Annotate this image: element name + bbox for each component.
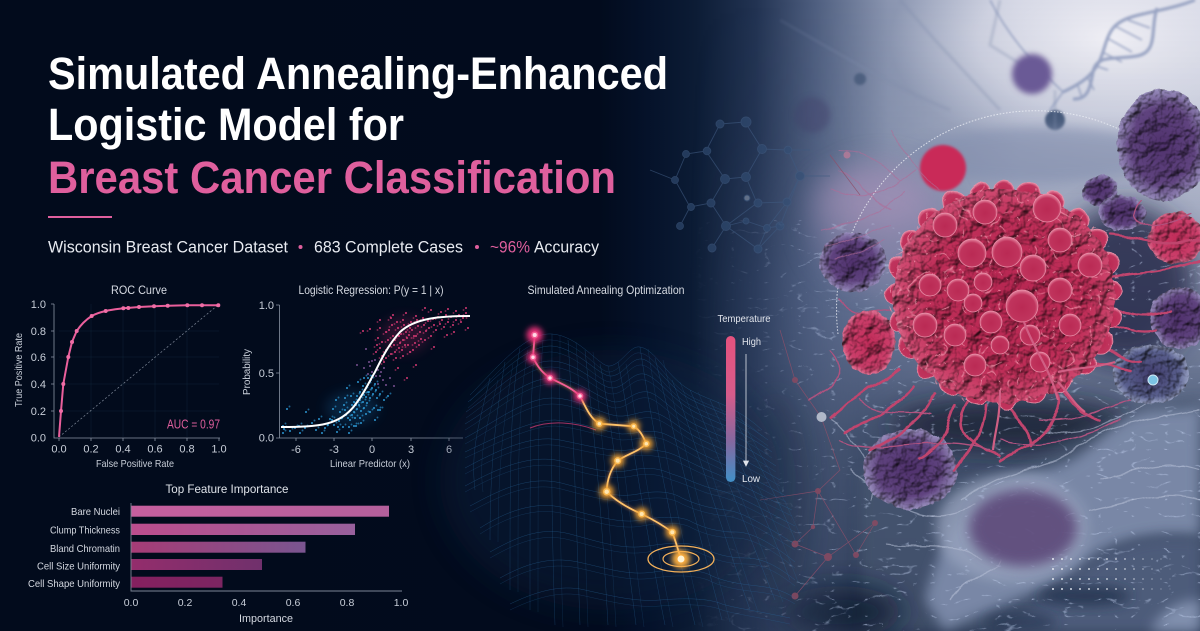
lumpy rim xyxy=(885,180,1122,409)
AUC label: AUC = 0.97 xyxy=(167,418,220,432)
path node glows xyxy=(527,327,690,568)
annealing title: Simulated Annealing Optimization xyxy=(528,283,684,297)
ROC y tick labels: 0.0 xyxy=(31,432,46,444)
small pink cell xyxy=(920,145,966,191)
main tumor xyxy=(885,180,1125,450)
bars xyxy=(131,506,389,588)
optimization path: cool segment xyxy=(580,396,681,559)
logistic x tick labels xyxy=(291,444,452,456)
ROC x tick labels: 0.2 xyxy=(83,444,99,456)
ROC title: ROC Curve xyxy=(111,283,167,297)
title accent rule xyxy=(48,216,112,218)
annealing optimization panel xyxy=(440,283,803,627)
ROC y tick labels: 1.0 xyxy=(31,299,46,311)
logistic axis titles: Linear Predictor (x) xyxy=(330,458,410,470)
temperature bar xyxy=(726,336,735,482)
dashed orbit arc xyxy=(837,111,1123,334)
ROC diagonal xyxy=(59,305,218,437)
feature labels: Clump Thickness xyxy=(50,524,120,536)
scatter: mixed class xyxy=(357,349,394,386)
mesh cross lines xyxy=(474,334,803,627)
logistic x tick labels: -3 xyxy=(329,444,339,456)
ROC curve chart: True Positive Rate xyxy=(13,333,25,407)
ROC curve chart xyxy=(13,283,227,470)
high label: High xyxy=(742,336,761,348)
temperature arrow xyxy=(744,354,748,466)
ROC x tick labels: 1.0 xyxy=(211,444,227,456)
tumor veins xyxy=(993,322,1115,450)
temperature label: Temperature xyxy=(718,313,771,325)
microscopy illustration: tumor cell and tissue xyxy=(690,0,1200,631)
x tick labels xyxy=(124,597,408,609)
ROC y tick labels: 0.2 xyxy=(31,406,46,418)
logistic y tick labels: 1.0 xyxy=(259,300,274,312)
subtitle: Wisconsin Breast Cancer Dataset xyxy=(48,238,288,256)
ROC axis titles: False Positive Rate xyxy=(96,458,174,470)
lumpy cells xyxy=(820,89,1200,566)
foreground cell nucleus spot xyxy=(1148,375,1158,385)
low label: Low xyxy=(742,473,760,485)
logistic x tick labels: 6 xyxy=(446,444,452,456)
ROC x tick labels: 0.6 xyxy=(147,444,163,456)
tumor cell ridges xyxy=(885,180,1125,412)
tissue fibre web xyxy=(690,220,1200,631)
DNA helix xyxy=(990,0,1195,110)
x tick labels: 0.8 xyxy=(340,597,354,609)
x tick labels: 0.0 xyxy=(124,597,138,609)
feature labels: Bland Chromatin xyxy=(50,543,120,555)
ROC x tick labels: 0.0 xyxy=(51,444,67,456)
feature labels: Bare Nuclei xyxy=(71,506,120,518)
pale connective fibres xyxy=(830,400,1200,600)
background xyxy=(626,0,1200,631)
logistic curve xyxy=(281,316,470,427)
subtitle: ~96% xyxy=(490,238,530,256)
x axis title: Importance xyxy=(239,613,293,625)
logistic x tick labels: 0 xyxy=(369,444,375,456)
ROC y tick labels: 0.4 xyxy=(31,379,46,391)
logistic title: Logistic Regression: P(y = 1 | x) xyxy=(298,283,444,297)
scatter haze xyxy=(326,317,429,424)
logistic regression chart: Probability xyxy=(241,348,253,395)
logistic x tick labels: -6 xyxy=(291,444,301,456)
top purple cell xyxy=(1012,54,1052,94)
energy landscape mesh xyxy=(465,334,795,624)
ROC y tick labels: 0.6 xyxy=(31,352,46,364)
feature importance chart xyxy=(28,482,408,625)
scatter: positive class xyxy=(363,308,469,378)
landscape haze xyxy=(440,350,780,610)
blurred background cells and tissue xyxy=(740,0,1200,631)
title: Simulated Annealing-Enhanced xyxy=(48,48,668,99)
extra scatter density xyxy=(286,310,466,430)
ROC line xyxy=(59,305,218,437)
optimization path: hot segment xyxy=(533,335,580,396)
x tick labels: 0.6 xyxy=(286,597,300,609)
ROC x tick labels xyxy=(51,444,227,456)
x tick labels: 0.2 xyxy=(178,597,192,609)
feature labels: Cell Shape Uniformity xyxy=(28,578,121,590)
x tick labels: 0.4 xyxy=(232,597,246,609)
ROC points xyxy=(59,303,220,413)
ROC grid xyxy=(59,304,219,437)
optimization path glow xyxy=(533,335,681,559)
title xyxy=(48,48,668,203)
logistic y tick labels xyxy=(259,300,274,444)
subtitle xyxy=(48,238,599,256)
temperature legend xyxy=(718,313,771,485)
feature labels: Cell Size Uniformity xyxy=(37,560,121,572)
axes xyxy=(131,503,402,591)
title: Breast Cancer Classification xyxy=(48,152,616,203)
subtitle: 683 Complete Cases xyxy=(314,238,463,256)
logistic y tick labels: 0.0 xyxy=(259,432,274,444)
left red cell xyxy=(842,310,896,374)
logistic y tick labels: 0.5 xyxy=(259,368,274,380)
scatter: negative class xyxy=(283,376,388,433)
title: Logistic Model for xyxy=(48,99,404,150)
filaments xyxy=(810,130,1200,470)
ROC axes xyxy=(51,304,220,441)
feature labels xyxy=(28,506,121,590)
ROC x tick labels: 0.8 xyxy=(179,444,195,456)
logistic regression chart xyxy=(241,283,470,470)
molecular network xyxy=(650,117,830,253)
dot grid xyxy=(1052,558,1171,590)
ROC y tick labels xyxy=(31,299,46,444)
ROC y tick labels: 0.8 xyxy=(31,326,46,338)
target rings xyxy=(648,546,714,572)
lower-left network xyxy=(760,152,878,600)
ROC x tick labels: 0.4 xyxy=(115,444,131,456)
raised nodules xyxy=(913,194,1102,376)
tumor body xyxy=(893,189,1115,403)
faint pink ridge xyxy=(530,423,596,430)
subtitle: Accuracy xyxy=(534,238,599,256)
path nodes xyxy=(530,332,684,562)
logistic axes xyxy=(276,305,463,441)
chart title: Top Feature Importance xyxy=(166,482,289,496)
logistic x tick labels: 3 xyxy=(408,444,414,456)
x tick labels: 1.0 xyxy=(394,597,408,609)
